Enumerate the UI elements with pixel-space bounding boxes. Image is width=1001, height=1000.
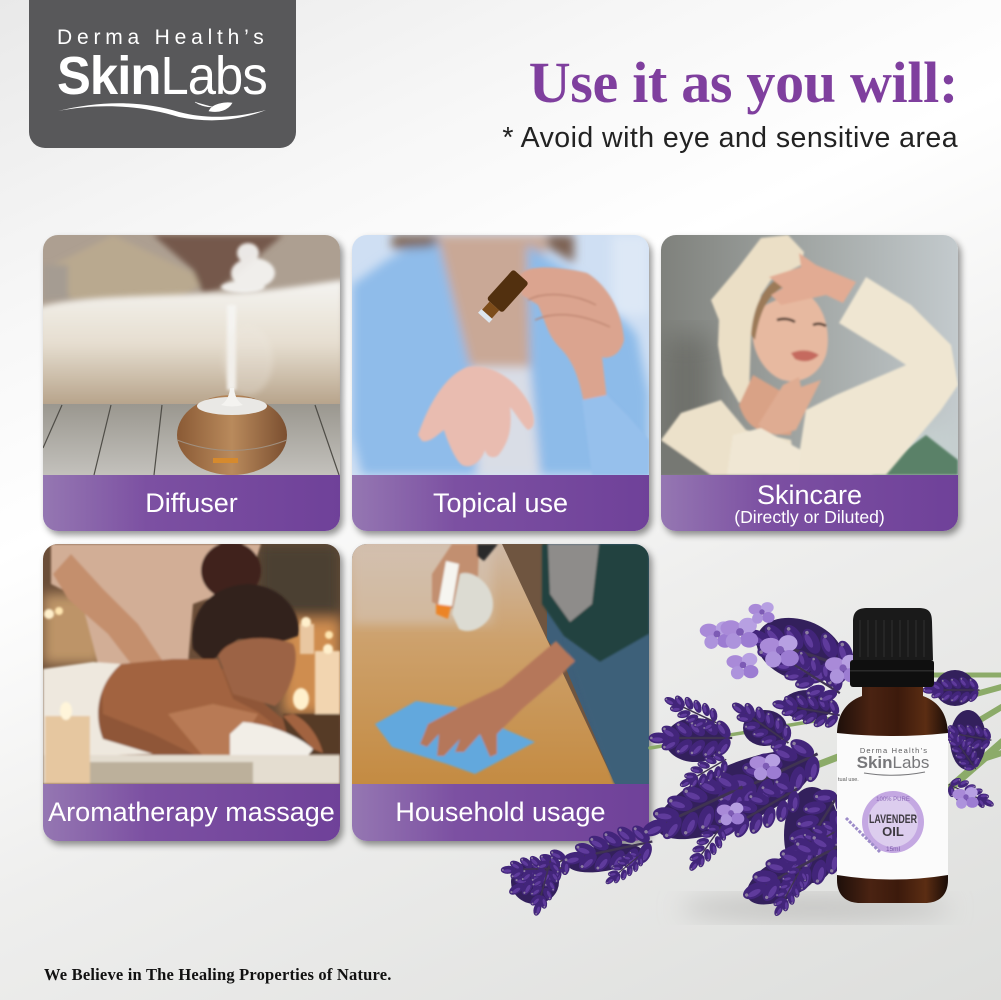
label [352,784,649,841]
label: Household usage [395,797,606,827]
bottle: Derma Health’s [860,746,928,755]
spike shadows [511,606,986,915]
logo block [29,0,296,148]
title: Use it as you will: [529,50,958,115]
panel: skincare [661,235,958,531]
panel: aromatherapy massage [43,544,340,841]
label: Topical use [433,488,568,518]
logo wordmark: SkinLabs [57,46,267,106]
product: lavender and bottle [500,602,1001,925]
bottle: 15ml [886,846,901,853]
bottle: tual use. [838,777,859,783]
label: Diffuser [145,488,238,518]
logo swoosh [58,102,266,120]
label sprig [846,818,880,852]
panel: household usage [352,544,649,841]
bottle: SkinLabs [857,753,929,772]
label: Aromatherapy massage [48,797,335,827]
label [661,475,958,532]
spikes [500,841,578,909]
footer tagline: We Believe in The Healing Properties of Nature. [44,965,392,984]
bottle [837,608,948,903]
label [43,784,340,841]
photo: cleaning table [352,544,649,784]
subtitle: * Avoid with eye and sensitive area [502,122,958,154]
lavender flowers [500,602,999,922]
pale florets [700,621,733,649]
photo: massage [43,544,340,784]
label [352,475,649,532]
label: (Directly or Diluted) [734,507,885,527]
panel: diffuser [43,235,340,531]
soft shadow [680,894,950,922]
photo: diffuser [43,235,340,475]
bottle: OIL [882,824,904,839]
bottle: 100% PURE [876,797,910,803]
logo brand line: Derma Health’s [57,26,269,49]
label: Skincare [757,480,862,510]
panel: topical use [352,235,649,531]
bottle label [837,733,948,880]
bottle: LAVENDER [869,812,917,826]
photo: woman with towel [661,235,958,475]
photo: dropper bottle over hand [352,235,649,475]
bottle glass [837,687,948,903]
stems [650,675,1001,870]
label [43,475,340,532]
bottle cap [853,608,933,660]
